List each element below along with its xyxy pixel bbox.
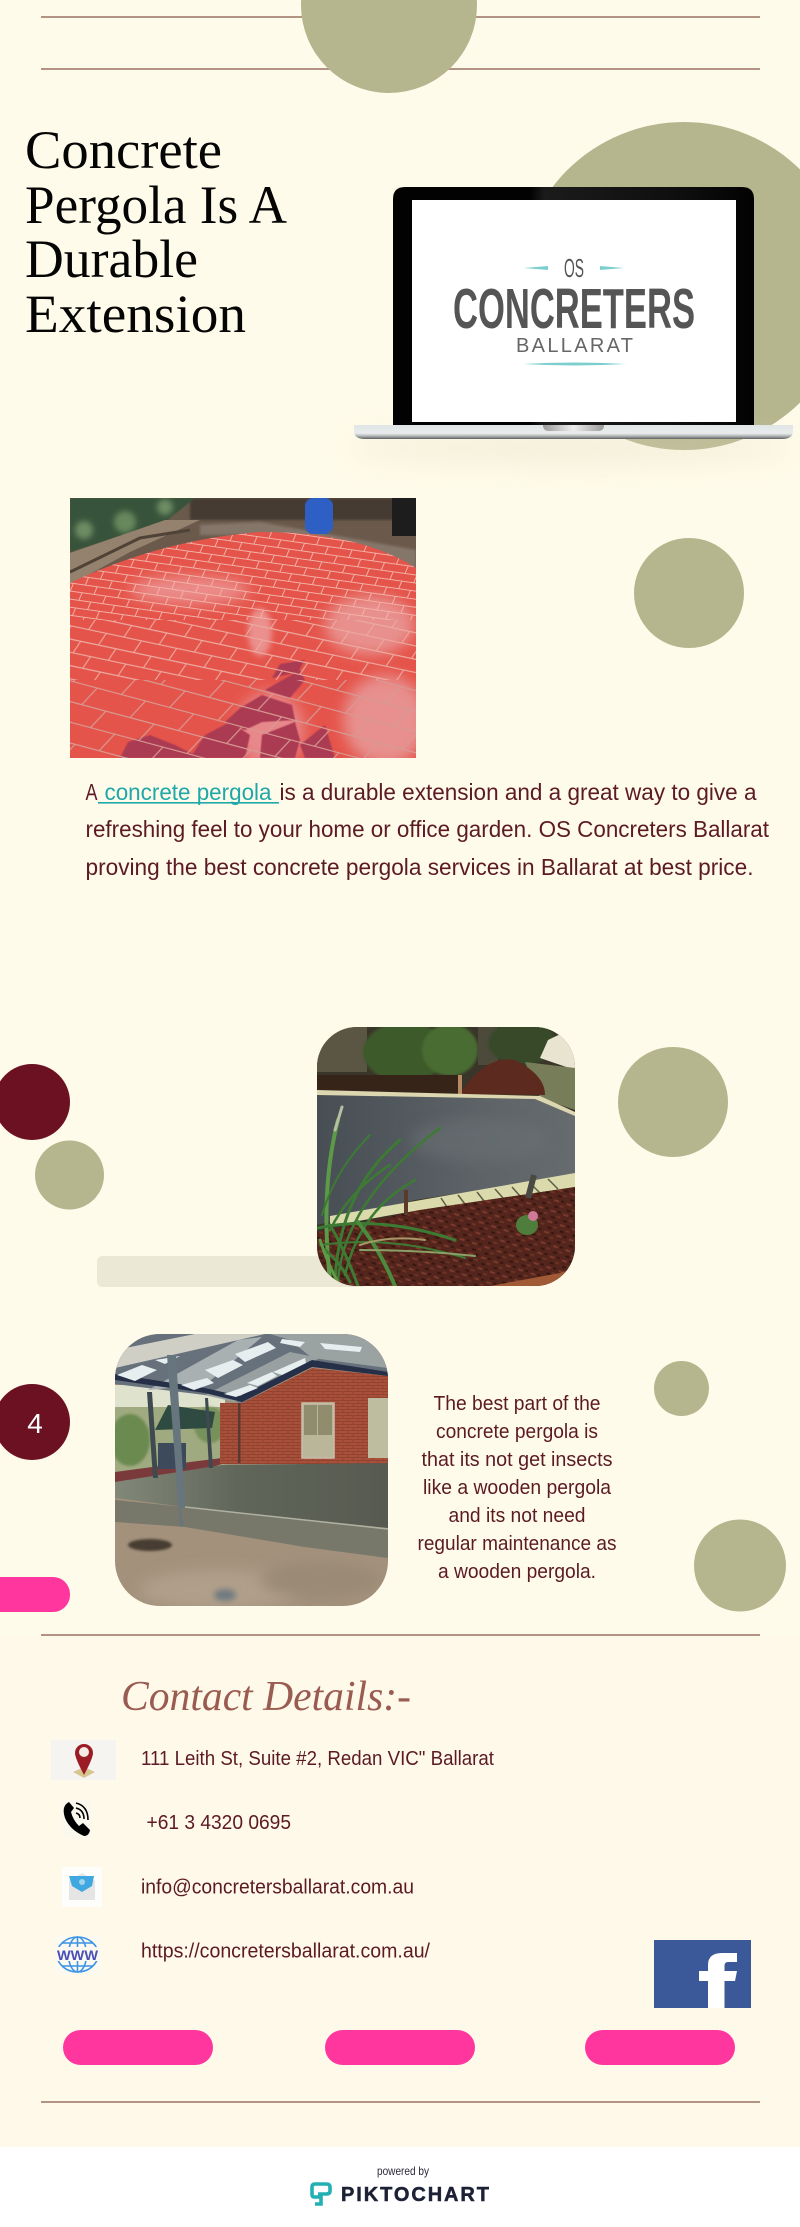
olive circle large right <box>694 1520 786 1612</box>
text block: like a wooden pergola <box>423 1477 612 1499</box>
text block: concrete pergola is <box>436 1421 598 1443</box>
footer: powered by piktochart: powered by <box>377 2164 429 2178</box>
skylights <box>117 1365 157 1381</box>
pink pill centre <box>325 2030 475 2065</box>
text block: regular maintenance as <box>418 1533 616 1555</box>
icon: map pin <box>51 1740 116 1780</box>
icon: www globe: WWW <box>57 1947 99 1963</box>
title: Pergola Is A <box>25 175 287 235</box>
icon: mail <box>62 1867 102 1907</box>
trees <box>115 1407 225 1472</box>
email: info@concretersballarat.com.au <box>141 1876 414 1898</box>
olive circle small right <box>654 1361 709 1416</box>
text block: The best part of the <box>434 1393 600 1415</box>
paragraph: proving the best concrete pergola services in Ballarat at best price. <box>86 854 754 880</box>
slab edge <box>115 1500 388 1558</box>
slab top <box>115 1463 388 1528</box>
website: https://concretersballarat.com.au/ <box>141 1940 430 1962</box>
contact background <box>0 1636 800 2147</box>
olive right circle <box>618 1047 728 1157</box>
logo: OS <box>564 253 584 283</box>
title: Concrete <box>25 120 222 180</box>
address: 111 Leith St, Suite #2, Redan VIC" Ballarat <box>141 1748 494 1770</box>
icon: phone <box>62 1800 92 1838</box>
roof <box>115 1334 388 1403</box>
brick wall <box>220 1368 388 1464</box>
footer background <box>0 2147 800 2227</box>
photo: concrete driveway <box>317 1021 575 1286</box>
footer: powered by piktochart <box>312 2164 489 2206</box>
maroon number circle <box>0 1384 70 1460</box>
link: concrete pergola: concrete pergola <box>104 779 272 805</box>
photo: pergola and concrete slab <box>110 1334 388 1610</box>
footer: powered by piktochart: PIKTOCHART <box>341 2184 489 2206</box>
title <box>25 120 287 344</box>
olive small circle <box>35 1140 104 1210</box>
maroon number circle: 4 <box>27 1408 43 1439</box>
laptop with logo <box>345 187 795 466</box>
paragraph <box>86 779 770 880</box>
title: Durable <box>25 229 198 289</box>
logo <box>453 253 695 366</box>
pink pill left <box>63 2030 213 2065</box>
laptop screen <box>393 187 754 425</box>
top olive circle <box>301 0 477 93</box>
paragraph: is a durable extension and a great way to give a <box>280 779 757 805</box>
text block: and its not need <box>448 1505 586 1527</box>
text block: a wooden pergola. <box>438 1561 596 1583</box>
contact heading: Contact Details:- <box>121 1674 411 1720</box>
logo: BALLARAT <box>516 335 633 357</box>
icon: piktochart logo <box>312 2184 330 2204</box>
icon: www globe <box>55 1936 101 1974</box>
phone number: +61 3 4320 0695 <box>146 1812 291 1834</box>
text block: that its not get insects <box>422 1449 612 1471</box>
olive circle behind laptop <box>519 122 800 450</box>
posts <box>167 1355 185 1526</box>
olive circle <box>634 538 744 648</box>
laptop base <box>354 425 793 439</box>
pale bar <box>97 1256 367 1287</box>
photo: red brick paving <box>70 498 427 768</box>
pink bar left <box>0 1577 70 1612</box>
tree shadow <box>120 660 335 758</box>
pink pill right <box>585 2030 735 2065</box>
title: Extension <box>25 284 246 344</box>
maroon circle <box>0 1064 70 1140</box>
text block <box>418 1393 616 1583</box>
paragraph: refreshing feel to your home or office garden. OS Concreters Ballarat <box>86 816 770 842</box>
laptop shadow <box>345 430 795 466</box>
paragraph: A <box>86 779 98 805</box>
icon: facebook <box>654 1940 751 2008</box>
